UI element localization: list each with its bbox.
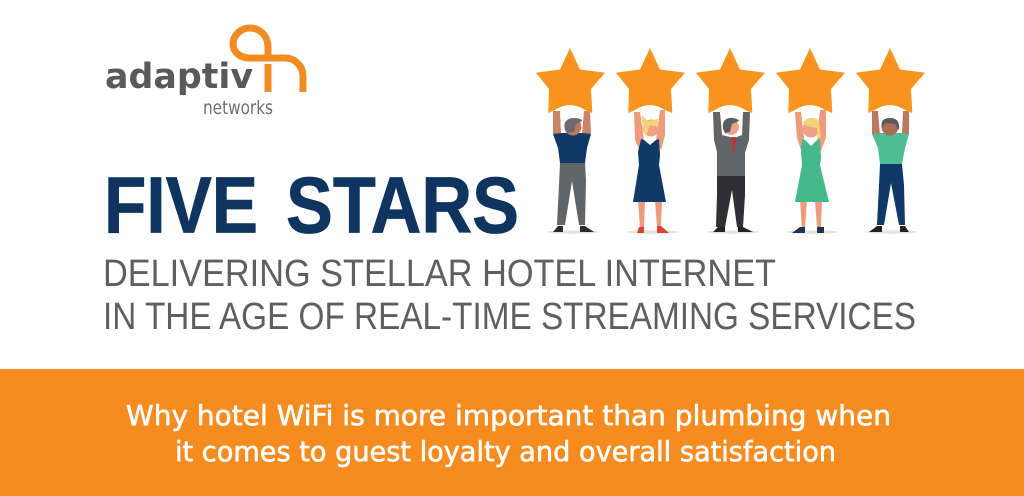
star 3: [696, 48, 765, 113]
person 1: man in navy shirt holding star: [547, 111, 599, 234]
banner text: it comes to guest loyalty and overall satisfaction: [175, 436, 836, 468]
star 1: [536, 48, 605, 113]
subtitle: [103, 253, 916, 338]
person 2: woman in navy dress holding star: [627, 110, 679, 234]
star 2: [616, 48, 685, 113]
banner text: Why hotel WiFi is more important than plumbing when: [126, 400, 891, 432]
person 3: man in grey suit holding star: [707, 112, 759, 234]
subtitle: IN THE AGE OF REAL-TIME STREAMING SERVICES: [103, 296, 916, 338]
star 5: [856, 48, 925, 113]
title: FIVE: [104, 160, 258, 250]
logo: adaptiv networks: [105, 28, 303, 119]
banner text: [126, 400, 891, 468]
logo wordmark: adaptiv: [105, 57, 253, 97]
subtitle: DELIVERING STELLAR HOTEL INTERNET: [103, 253, 776, 295]
logo mark: [233, 28, 303, 92]
star 4: [776, 48, 845, 113]
logo subtext: networks: [203, 97, 273, 119]
title: [104, 160, 519, 250]
person 4: woman in green dress holding star: [786, 110, 838, 234]
orange banner: [0, 369, 1024, 496]
title: STARS: [286, 160, 519, 250]
person 5: man in green shirt holding star: [865, 111, 917, 234]
